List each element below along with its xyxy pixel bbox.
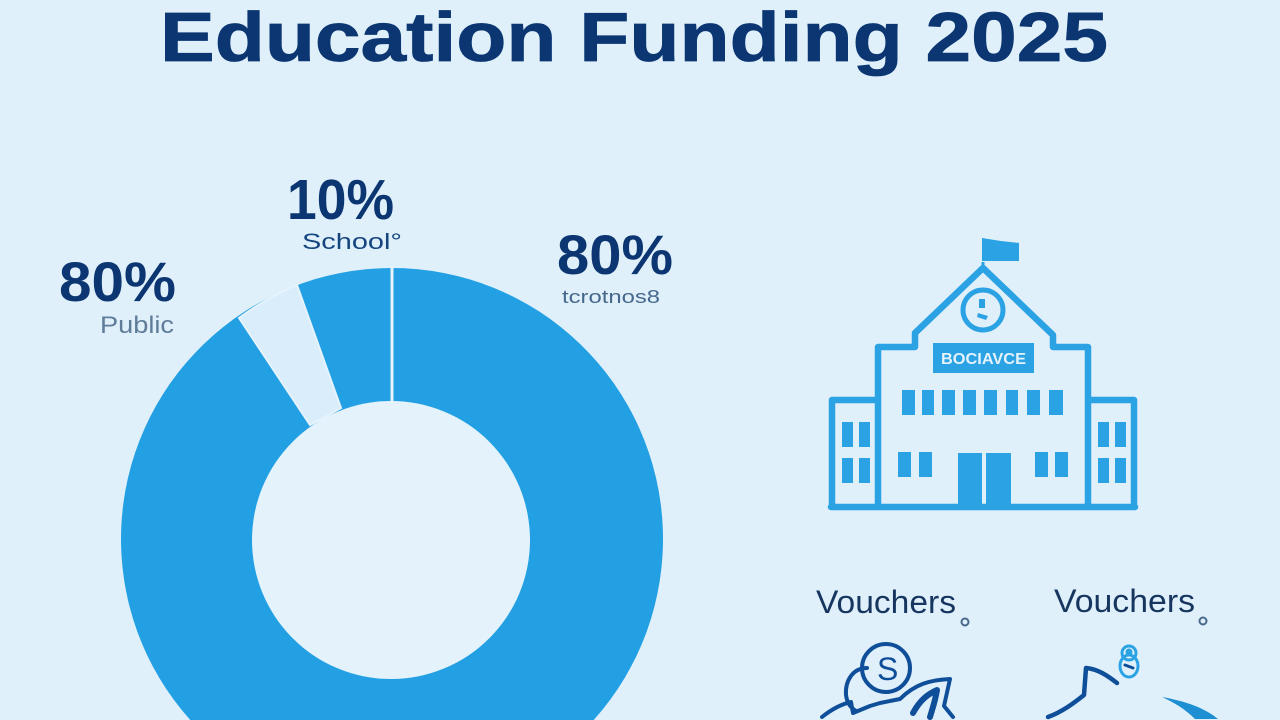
curved stroke	[1162, 697, 1218, 719]
piggy body	[822, 679, 953, 717]
sign banner: BOCIAVCE	[941, 351, 1026, 368]
title: Education Funding 2025	[160, 0, 1108, 76]
right wing windows	[1098, 422, 1126, 483]
donut chart	[121, 266, 663, 720]
label: 10% School: School°	[302, 229, 402, 254]
slice: light wedge	[239, 285, 341, 425]
donut hole	[252, 401, 530, 679]
clock emblem	[963, 290, 1003, 330]
icon: piggy bank with coins	[822, 644, 953, 717]
flag	[982, 238, 1019, 261]
label: 80% Public	[59, 250, 176, 339]
icon: second piggy bank	[1048, 646, 1218, 719]
label: 80% right: tcrotnos8	[562, 287, 660, 307]
label: 80% Public: Public	[100, 312, 174, 339]
label: 10% School: 10%	[287, 168, 394, 232]
dollar sign: S	[877, 651, 898, 687]
door	[958, 453, 1011, 506]
piggy ear	[913, 690, 937, 717]
label: Vouchers left: Vouchers	[816, 584, 956, 620]
front coin	[862, 644, 910, 692]
left wing windows	[842, 422, 870, 483]
upper windows	[902, 390, 1063, 415]
label: 80% Public: 80%	[59, 250, 176, 313]
label: Vouchers right: Vouchers	[1054, 583, 1195, 619]
icon: school building	[831, 238, 1135, 507]
lower windows	[898, 452, 1068, 477]
slice divider	[390, 266, 394, 403]
label: 80% right: 80%	[557, 223, 673, 286]
sign banner	[933, 343, 1034, 373]
donut ring	[121, 268, 663, 720]
back coin	[846, 668, 867, 711]
coin	[1120, 646, 1138, 677]
piggy back and ear	[1048, 668, 1117, 717]
building outline	[831, 268, 1135, 507]
flag pole	[982, 262, 984, 270]
